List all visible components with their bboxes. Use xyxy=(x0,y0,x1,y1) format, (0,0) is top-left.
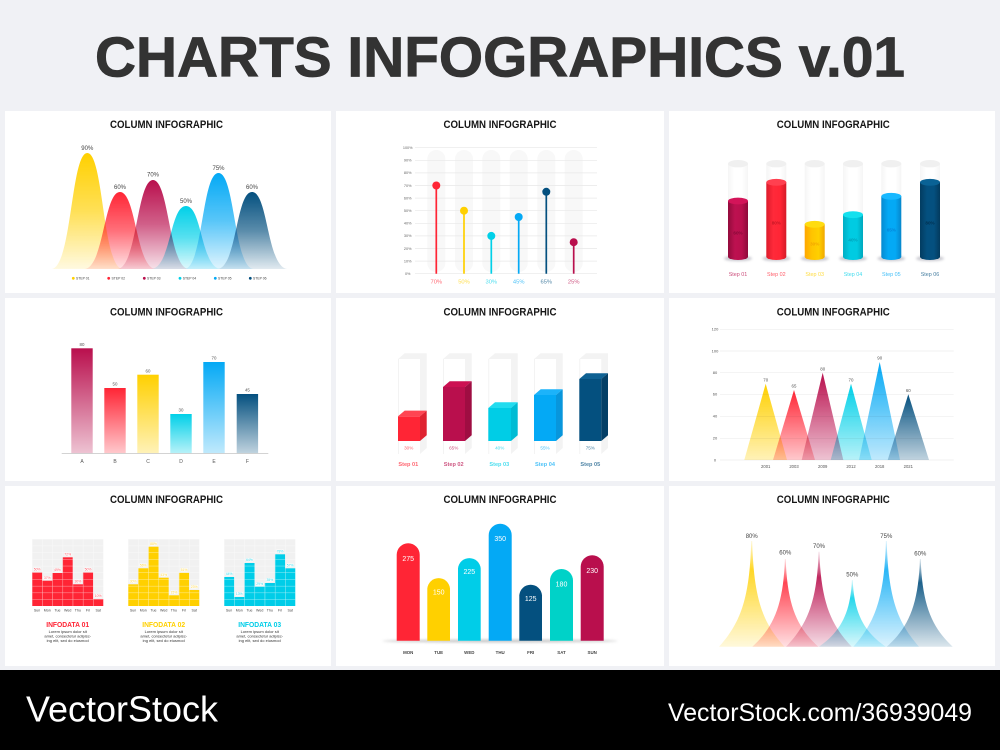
caption: infodata 01: Lorem ipsum dolor sit xyxy=(49,629,88,634)
y axis labels: 20 xyxy=(713,436,718,441)
step labels: Step 01 xyxy=(729,272,747,278)
value labels: 30 xyxy=(179,408,184,413)
percentage labels: 65% xyxy=(887,228,896,233)
year labels: 2018 xyxy=(875,464,885,469)
day labels: THU xyxy=(496,650,505,655)
value labels: 80 xyxy=(80,342,85,347)
value labels: 50% xyxy=(846,572,859,578)
percentage labels: 65% xyxy=(449,446,458,451)
chart: infodata 03: Sun xyxy=(226,609,232,613)
panel: bell curve chart xyxy=(5,111,331,293)
value labels: 70% xyxy=(147,172,160,178)
axis labels: 70% xyxy=(404,184,412,188)
caption: infodata 02: ing elit, sed do eiusmod xyxy=(143,638,185,643)
value labels: 70 xyxy=(849,377,854,382)
chart: infodata 01: 72% xyxy=(64,552,71,556)
category labels: A xyxy=(80,459,84,465)
caption: infodata 01 xyxy=(44,622,92,643)
year labels: 2003 xyxy=(789,464,799,469)
chart: infodata 03: Thu xyxy=(267,609,273,613)
caption: infodata 03: INFODATA 03 xyxy=(238,622,281,629)
year labels: 2012 xyxy=(846,464,856,469)
category labels: E xyxy=(212,459,216,465)
heading: COLUMN INFOGRAPHIC xyxy=(777,119,890,131)
empty box outlines xyxy=(398,353,608,454)
value labels: 70% xyxy=(813,544,826,550)
y axis labels: 80 xyxy=(713,370,718,375)
filled cylinders xyxy=(728,179,940,260)
value labels xyxy=(80,342,250,413)
background pills xyxy=(427,150,583,272)
value labels xyxy=(763,356,911,393)
caption: infodata 02: Lorem ipsum dolor sit xyxy=(145,629,184,634)
value labels: 230 xyxy=(586,568,598,575)
axis labels: 40% xyxy=(404,222,412,226)
value labels: 180 xyxy=(556,582,567,588)
axis labels: 60% xyxy=(404,196,412,200)
panel: gradient bar chart xyxy=(5,298,331,481)
chart: infodata 01: Tue xyxy=(54,609,61,613)
step labels xyxy=(398,462,600,468)
footer url: VectorStock.com/36939049 xyxy=(668,699,972,727)
bell curves xyxy=(52,153,287,269)
value labels: 90% xyxy=(81,146,94,152)
legend: STEP 03 xyxy=(147,276,161,280)
heading: COLUMN INFOGRAPHIC xyxy=(110,306,223,318)
value labels: 60 xyxy=(906,388,911,393)
chart: infodata 02: Sun xyxy=(130,609,136,613)
category labels xyxy=(80,459,249,465)
value labels: 70% xyxy=(430,279,442,285)
day labels: WED xyxy=(464,650,474,655)
axis labels: 90% xyxy=(404,159,412,163)
percentage labels: 40% xyxy=(495,446,504,451)
category labels: C xyxy=(146,459,150,465)
axis labels: 80% xyxy=(404,171,412,175)
caption: infodata 01: ing elit, sed do eiusmod xyxy=(47,638,89,643)
triangles xyxy=(744,362,929,460)
axis labels: 20% xyxy=(404,247,412,251)
value labels: 275 xyxy=(402,556,414,563)
main title: CHARTS INFOGRAPHICS v.01 xyxy=(95,26,905,90)
chart: infodata 01: Thu xyxy=(75,609,81,613)
value labels: 60% xyxy=(114,185,127,191)
caption: infodata 01: amet, consectetur adipisc- xyxy=(44,634,92,638)
chart: infodata 02: Thu xyxy=(171,609,177,613)
chart: infodata 03: Wed xyxy=(256,609,263,613)
value labels: 60% xyxy=(914,551,927,557)
value labels: 150 xyxy=(433,590,445,596)
year labels xyxy=(761,464,914,469)
axis labels: 10% xyxy=(404,259,412,263)
chart: infodata 03 xyxy=(224,539,295,613)
filled boxes xyxy=(398,373,608,441)
percentage labels: 30% xyxy=(810,242,819,247)
chart: infodata 03: 35% xyxy=(267,578,273,582)
step labels: Step 05 xyxy=(580,462,600,468)
step labels: Step 03 xyxy=(805,272,824,278)
chart: infodata 02: 23% xyxy=(191,585,198,589)
bars xyxy=(71,348,258,453)
chart: infodata 02 xyxy=(128,539,199,613)
chart: infodata 02: 56% xyxy=(140,564,147,568)
panel: spike chart xyxy=(669,486,995,666)
step labels: Step 05 xyxy=(882,272,901,278)
rounded bars xyxy=(397,524,604,641)
chart: infodata 02: 88% xyxy=(150,542,157,546)
step labels: Step 02 xyxy=(444,462,464,468)
percentage labels: 75% xyxy=(586,446,595,451)
chart: infodata 01: Fri xyxy=(86,609,90,613)
caption: infodata 02 xyxy=(140,622,188,643)
value labels: 225 xyxy=(463,569,475,576)
percentage labels: 80% xyxy=(772,221,781,226)
panel: cylinder chart xyxy=(669,111,995,293)
chart: infodata 03: 13% xyxy=(236,592,243,596)
value labels xyxy=(81,146,259,205)
chart: infodata 01: 50% xyxy=(34,568,40,572)
floor shadow xyxy=(382,640,618,642)
panel: rounded bar chart xyxy=(336,486,664,666)
chart: infodata 02: 43% xyxy=(160,573,167,577)
chart: infodata 03: 29% xyxy=(256,582,263,586)
percentage labels xyxy=(404,446,595,451)
panel: triangle chart xyxy=(669,298,995,481)
value labels: 45% xyxy=(513,279,525,285)
year labels: 2021 xyxy=(904,464,914,469)
caption: infodata 03 xyxy=(236,622,284,643)
axis labels xyxy=(403,146,413,276)
legend xyxy=(72,276,267,280)
value labels: 45 xyxy=(245,388,250,393)
lollipops xyxy=(432,182,578,274)
value labels: 60 xyxy=(146,368,151,373)
caption: infodata 02: amet, consectetur adipisc- xyxy=(140,634,188,638)
value labels: 90 xyxy=(877,356,883,361)
legend: STEP 06 xyxy=(253,276,267,280)
chart: infodata 02: Tue xyxy=(150,609,157,613)
percentage labels: 30% xyxy=(404,446,413,451)
y axis labels: 100 xyxy=(712,348,719,353)
chart: infodata 02: Wed xyxy=(160,609,167,613)
heading: COLUMN INFOGRAPHIC xyxy=(444,306,557,318)
heading: COLUMN INFOGRAPHIC xyxy=(110,494,223,506)
value labels: 80 xyxy=(820,366,826,371)
caption: infodata 03: ing elit, sed do eiusmod xyxy=(239,638,281,643)
day labels: TUE xyxy=(434,650,443,655)
value labels: 65 xyxy=(792,384,797,388)
chart: infodata 03: Fri xyxy=(278,609,282,613)
category labels: B xyxy=(113,459,117,465)
day labels: SAT xyxy=(557,650,566,655)
axis labels: 0% xyxy=(405,272,411,276)
chart: infodata 01: Sat xyxy=(95,609,101,613)
panel: three grid charts xyxy=(5,486,331,666)
percentage labels: 60% xyxy=(733,230,743,235)
step labels xyxy=(729,272,939,278)
percentage labels: 40% xyxy=(848,237,858,242)
axis labels: 50% xyxy=(404,209,412,213)
value labels: 25% xyxy=(568,279,580,285)
chart: infodata 01: 49% xyxy=(54,568,61,572)
step labels: Step 04 xyxy=(844,272,862,278)
chart: infodata 03: Tue xyxy=(246,609,253,613)
heading: COLUMN INFOGRAPHIC xyxy=(110,119,223,131)
chart: infodata 02: 15% xyxy=(171,590,177,594)
y axis labels: 60 xyxy=(713,392,718,397)
day labels xyxy=(403,650,597,655)
chart: infodata 02: Sat xyxy=(191,609,197,613)
percentage labels: 80% xyxy=(925,221,935,226)
value labels xyxy=(430,279,580,285)
step labels: Step 04 xyxy=(535,462,556,468)
category labels: F xyxy=(246,459,249,465)
value labels xyxy=(746,534,927,578)
chart: infodata 03: 57% xyxy=(287,564,294,568)
value labels: 75% xyxy=(880,534,893,540)
legend: STEP 04 xyxy=(183,276,196,280)
chart: infodata 03: Sat xyxy=(287,609,293,613)
empty glass cylinders xyxy=(728,160,940,244)
chart: infodata 01: Wed xyxy=(64,609,71,613)
chart: infodata 01: 30% xyxy=(75,580,81,584)
spikes xyxy=(719,541,953,647)
value labels: 50% xyxy=(458,279,470,285)
chart: infodata 01: Sun xyxy=(34,609,40,613)
panel: 3D box chart xyxy=(336,298,664,481)
y axis labels: 120 xyxy=(712,327,719,332)
heading: COLUMN INFOGRAPHIC xyxy=(777,494,890,506)
legend: STEP 02 xyxy=(112,276,125,280)
chart: infodata 03: 44% xyxy=(226,572,232,576)
step labels: Step 03 xyxy=(489,462,509,468)
footer bar xyxy=(0,670,1000,750)
value labels: 125 xyxy=(525,596,537,603)
step labels: Step 01 xyxy=(398,462,418,468)
percentage labels: 55% xyxy=(540,446,550,451)
chart: infodata 02: 51% xyxy=(181,568,187,572)
value labels: 50 xyxy=(113,382,118,387)
chart: infodata 03: 78% xyxy=(277,550,283,554)
caption: infodata 01: INFODATA 01 xyxy=(46,622,89,629)
chart: infodata 01: Mon xyxy=(44,609,51,613)
heading: COLUMN INFOGRAPHIC xyxy=(777,306,890,318)
chart: infodata 03: 64% xyxy=(246,558,253,562)
chart: infodata 01: 50% xyxy=(85,568,91,572)
value labels: 60% xyxy=(779,550,792,556)
y axis labels xyxy=(712,327,719,462)
day labels: MON xyxy=(403,650,413,655)
value labels: 80% xyxy=(746,534,758,540)
axis labels: 30% xyxy=(404,234,412,238)
caption: infodata 03: amet, consectetur adipisc- xyxy=(236,634,284,638)
caption: infodata 03: Lorem ipsum dolor sit xyxy=(241,629,280,634)
axis labels: 100% xyxy=(403,146,413,150)
footer brand: VectorStock xyxy=(26,689,219,730)
chart: infodata 01: 37% xyxy=(44,576,51,580)
value labels: 75% xyxy=(212,166,225,172)
year labels: 2009 xyxy=(818,464,828,469)
category labels: D xyxy=(179,459,183,465)
percentage labels xyxy=(733,221,935,247)
value labels: 30% xyxy=(485,279,497,285)
chart: infodata 01 xyxy=(32,539,103,613)
baseline axis xyxy=(62,452,268,454)
value labels: 65% xyxy=(540,279,552,285)
step labels: Step 06 xyxy=(921,272,939,278)
heading: COLUMN INFOGRAPHIC xyxy=(444,119,557,131)
value labels: 70 xyxy=(212,356,217,361)
floor shadows xyxy=(724,256,944,261)
value labels: 70 xyxy=(763,377,769,382)
year labels: 2001 xyxy=(761,464,771,469)
value labels: 60% xyxy=(246,185,259,191)
day labels: SUN xyxy=(588,650,597,655)
step labels: Step 02 xyxy=(767,272,786,278)
value labels: 350 xyxy=(494,536,506,543)
chart: infodata 02: 30% xyxy=(130,580,136,584)
chart: infodata 01: 10% xyxy=(95,594,102,598)
heading: COLUMN INFOGRAPHIC xyxy=(444,494,557,506)
y axis labels: 40 xyxy=(713,414,718,419)
legend: STEP 05 xyxy=(218,276,232,280)
value labels: 50% xyxy=(180,199,193,205)
value labels xyxy=(402,536,598,603)
y axis labels: 0 xyxy=(714,457,717,462)
chart: infodata 03: Mon xyxy=(236,609,243,613)
day labels: FRI xyxy=(527,650,534,655)
chart: infodata 02: Fri xyxy=(182,609,186,613)
caption: infodata 02: INFODATA 02 xyxy=(142,622,185,629)
legend: STEP 01 xyxy=(76,276,90,280)
panel: lollipop chart xyxy=(336,111,664,293)
chart: infodata 02: Mon xyxy=(140,609,147,613)
